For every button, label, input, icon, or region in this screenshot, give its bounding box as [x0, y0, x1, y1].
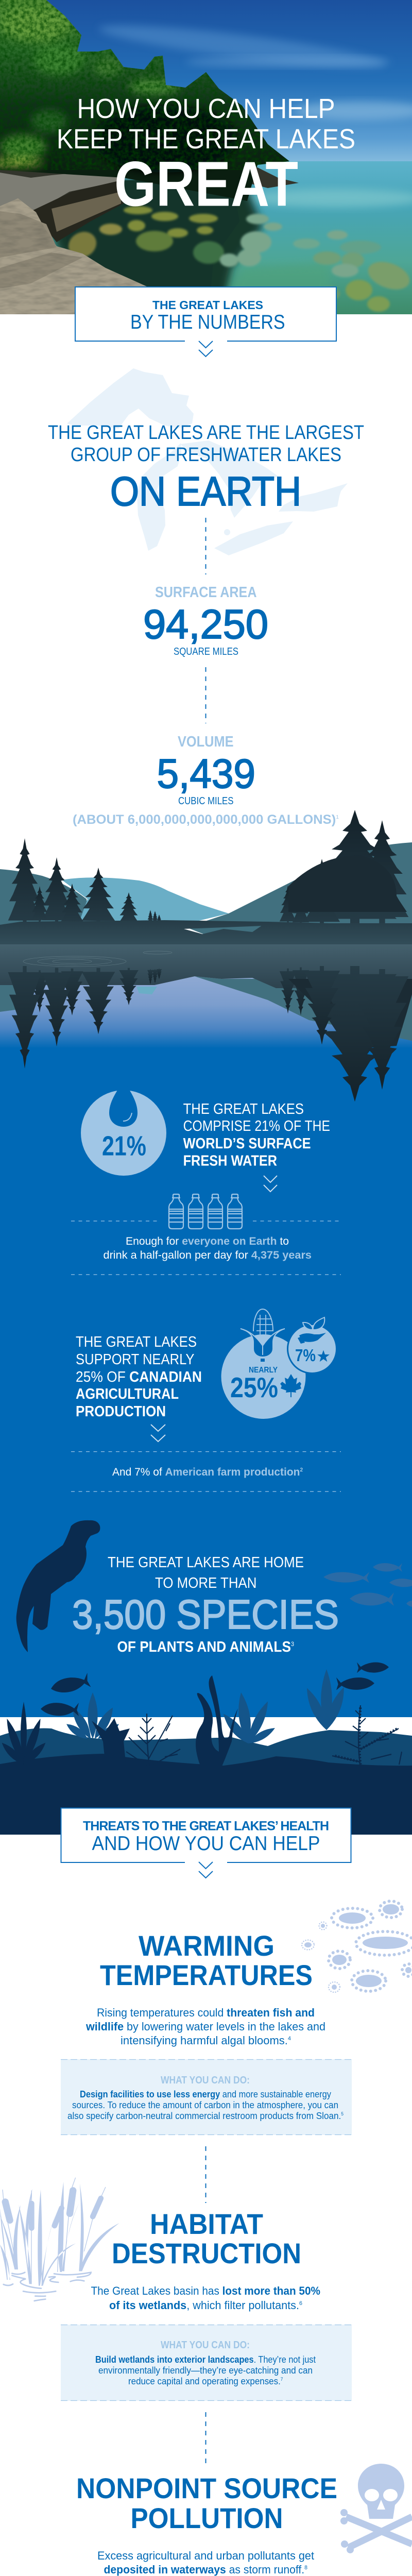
panel: what you can do, warming: WHAT YOU CAN DO: [161, 2075, 250, 2086]
icon: hand and sprout [298, 1317, 326, 1344]
chevrons [151, 1425, 165, 1442]
panel: what you can do, warming [61, 2059, 352, 2135]
heading: largest group of freshwater lakes [48, 422, 364, 514]
illustration: otter [16, 1520, 100, 1652]
illustration: hills and forest with lake reflection [0, 810, 412, 1101]
panel: what you can do, habitat: environmentally friendly—they’re eye-catching and can [98, 2365, 313, 2376]
icon: cattail reeds [0, 2178, 119, 2301]
text: half-gallon fact [103, 1235, 312, 1261]
threat: warming temperatures: Rising temperatures could threaten fish and [97, 2006, 315, 2019]
section header: threats and how you can help: AND HOW YOU CAN HELP [92, 1833, 320, 1855]
chevrons [199, 341, 213, 357]
stat: surface area: SQUARE MILES [174, 646, 238, 657]
threat: warming temperatures: TEMPERATURES [100, 1959, 313, 1991]
chevrons [199, 1862, 213, 1878]
heading: largest group of freshwater lakes: ON EARTH [110, 468, 301, 514]
threat: habitat destruction: of its wetlands, which filter pollutants. [109, 2299, 301, 2312]
threat: habitat destruction: DESTRUCTION [112, 2237, 301, 2269]
panel: what you can do, habitat [61, 2325, 352, 2401]
threat: warming temperatures: wildlife by lowering water levels in the lakes and [85, 2020, 325, 2033]
threat: habitat destruction: 6 [299, 2300, 302, 2307]
badges: 25 percent and 7 percent with corn and hand icons: 7% [295, 1346, 316, 1365]
threat: habitat destruction: The Great Lakes basin has lost more than 50% [91, 2284, 320, 2297]
panel: what you can do, habitat: 7 [281, 2377, 283, 2382]
dark fish [41, 1662, 389, 1716]
panel: what you can do, warming: 5 [341, 2111, 344, 2116]
aquatic plants, teal [64, 1669, 349, 1747]
stat: volume [73, 734, 339, 827]
threat: warming temperatures: intensifying harmful algal blooms. [121, 2034, 288, 2047]
text: 3,500 species [72, 1554, 339, 1655]
panel: what you can do, habitat: Build wetlands into exterior landscapes. They’re not just [95, 2354, 316, 2365]
threat: warming temperatures: WARMING [139, 1929, 274, 1962]
text: canadian agricultural production: 25% OF CANADIAN [76, 1369, 202, 1385]
icon: skull and crossbones [340, 2464, 412, 2553]
text: american farm production: And 7% of American farm production [112, 1466, 300, 1478]
text: 21 percent of surface fresh water [183, 1101, 330, 1170]
badges: 25 percent and 7 percent with corn and hand icons [221, 1309, 337, 1419]
stat: volume: 1 [336, 815, 339, 820]
threat: nonpoint source pollution: Excess agricultural and urban pollutants get [97, 2549, 314, 2562]
text: 21 percent of surface fresh water: COMPRISE 21% OF THE [183, 1118, 330, 1134]
threat: nonpoint source pollution: deposited in waterways as storm runoff. [104, 2563, 307, 2576]
icon: corn [241, 1309, 285, 1362]
text: 3,500 species: TO MORE THAN [155, 1575, 256, 1591]
stat: surface area: SURFACE AREA [155, 584, 257, 601]
text: canadian agricultural production: AGRICULTURAL [76, 1386, 179, 1402]
threat: nonpoint source pollution: NONPOINT SOURCE [76, 2472, 337, 2504]
hero photo: lakeshore [0, 0, 412, 316]
text: 3,500 species: 3,500 SPECIES [72, 1591, 339, 1637]
threat: nonpoint source pollution: POLLUTION [131, 2502, 283, 2534]
section header: by the numbers: THE GREAT LAKES [152, 298, 263, 312]
stat: surface area: 94,250 [143, 601, 268, 647]
hero title: GREAT [114, 149, 298, 219]
badges: 25 percent and 7 percent with corn and hand icons: 25% [230, 1371, 278, 1403]
blue water panel [0, 1047, 412, 1717]
icon: four water bottles [169, 1194, 242, 1229]
threat: nonpoint source pollution [76, 2472, 337, 2576]
text: 21 percent of surface fresh water: WORLD’S SURFACE [183, 1136, 311, 1152]
section header: threats and how you can help [61, 1808, 351, 1862]
heading: largest group of freshwater lakes: THE GREAT LAKES ARE THE LARGEST [48, 422, 364, 444]
icon: star [317, 1350, 330, 1362]
text: 21 percent of surface fresh water: FRESH WATER [183, 1153, 277, 1170]
threat: warming temperatures: 4 [288, 2036, 291, 2042]
text: 3,500 species: OF PLANTS AND ANIMALS [117, 1639, 310, 1655]
text: half-gallon fact: drink a half-gallon per day for 4,375 years [103, 1249, 312, 1261]
chevrons [264, 1176, 277, 1192]
panel: what you can do, warming: also specify carbon-neutral commercial restroom products from Sloan. [67, 2111, 355, 2121]
text: canadian agricultural production: THE GREAT LAKES [76, 1334, 197, 1350]
text: canadian agricultural production: SUPPORT NEARLY [76, 1351, 195, 1368]
text: 21 percent of surface fresh water: THE GREAT LAKES [183, 1101, 304, 1117]
section header: threats and how you can help: THREATS TO THE GREAT LAKES’ HEALTH [83, 1819, 329, 1833]
icon: maple leaf [280, 1374, 301, 1397]
hero title: KEEP THE GREAT LAKES [57, 124, 355, 155]
stat: volume: VOLUME [178, 734, 234, 750]
stat: volume: CUBIC MILES [178, 795, 234, 807]
stat: 21 percent badge with water drop: 21% [102, 1130, 146, 1161]
illustration: lake bed [0, 1662, 412, 1835]
section header: by the numbers: BY THE NUMBERS [130, 311, 285, 333]
stat: 21 percent badge with water drop [81, 1080, 166, 1176]
stat: surface area [143, 584, 268, 657]
illustration: faded school of fish [323, 1563, 412, 1607]
heading: largest group of freshwater lakes: GROUP OF FRESHWATER LAKES [71, 444, 341, 466]
threat: habitat destruction: HABITAT [150, 2208, 263, 2240]
badges: 25 percent and 7 percent with corn and hand icons: NEARLY [249, 1366, 278, 1375]
text: american farm production: 2 [300, 1467, 303, 1473]
threat: habitat destruction [91, 2208, 320, 2312]
section header: by the numbers [75, 287, 336, 341]
panel: what you can do, warming: Design facilities to use less energy and more sustainable energy [80, 2089, 331, 2099]
hero title: HOW YOU CAN HELP [77, 93, 335, 124]
text: half-gallon fact: Enough for everyone on Earth to [126, 1235, 289, 1247]
text: canadian agricultural production: PRODUCTION [76, 1403, 166, 1420]
panel: what you can do, habitat: WHAT YOU CAN DO: [161, 2340, 250, 2351]
text: 3,500 species: 3 [291, 1640, 294, 1648]
threat: warming temperatures [85, 1929, 325, 2047]
map of the Great Lakes [67, 368, 348, 555]
stat: volume: (ABOUT 6,000,000,000,000,000 GALLONS) [73, 812, 330, 827]
reflected tree tips [8, 966, 408, 1101]
icon: sun-warmed water blobs [302, 1901, 412, 1992]
threat: nonpoint source pollution: 8 [304, 2565, 307, 2571]
panel: what you can do, habitat: reduce capital and operating expenses. [128, 2376, 290, 2386]
stat: volume: 5,439 [157, 751, 255, 796]
text: canadian agricultural production [76, 1334, 202, 1420]
aquatic plants, dark [0, 1675, 402, 1767]
text: 3,500 species: THE GREAT LAKES ARE HOME [108, 1554, 304, 1571]
hero title [57, 93, 355, 219]
panel: what you can do, warming: sources. To reduce the amount of carbon in the atmosphere, you can [72, 2100, 338, 2110]
